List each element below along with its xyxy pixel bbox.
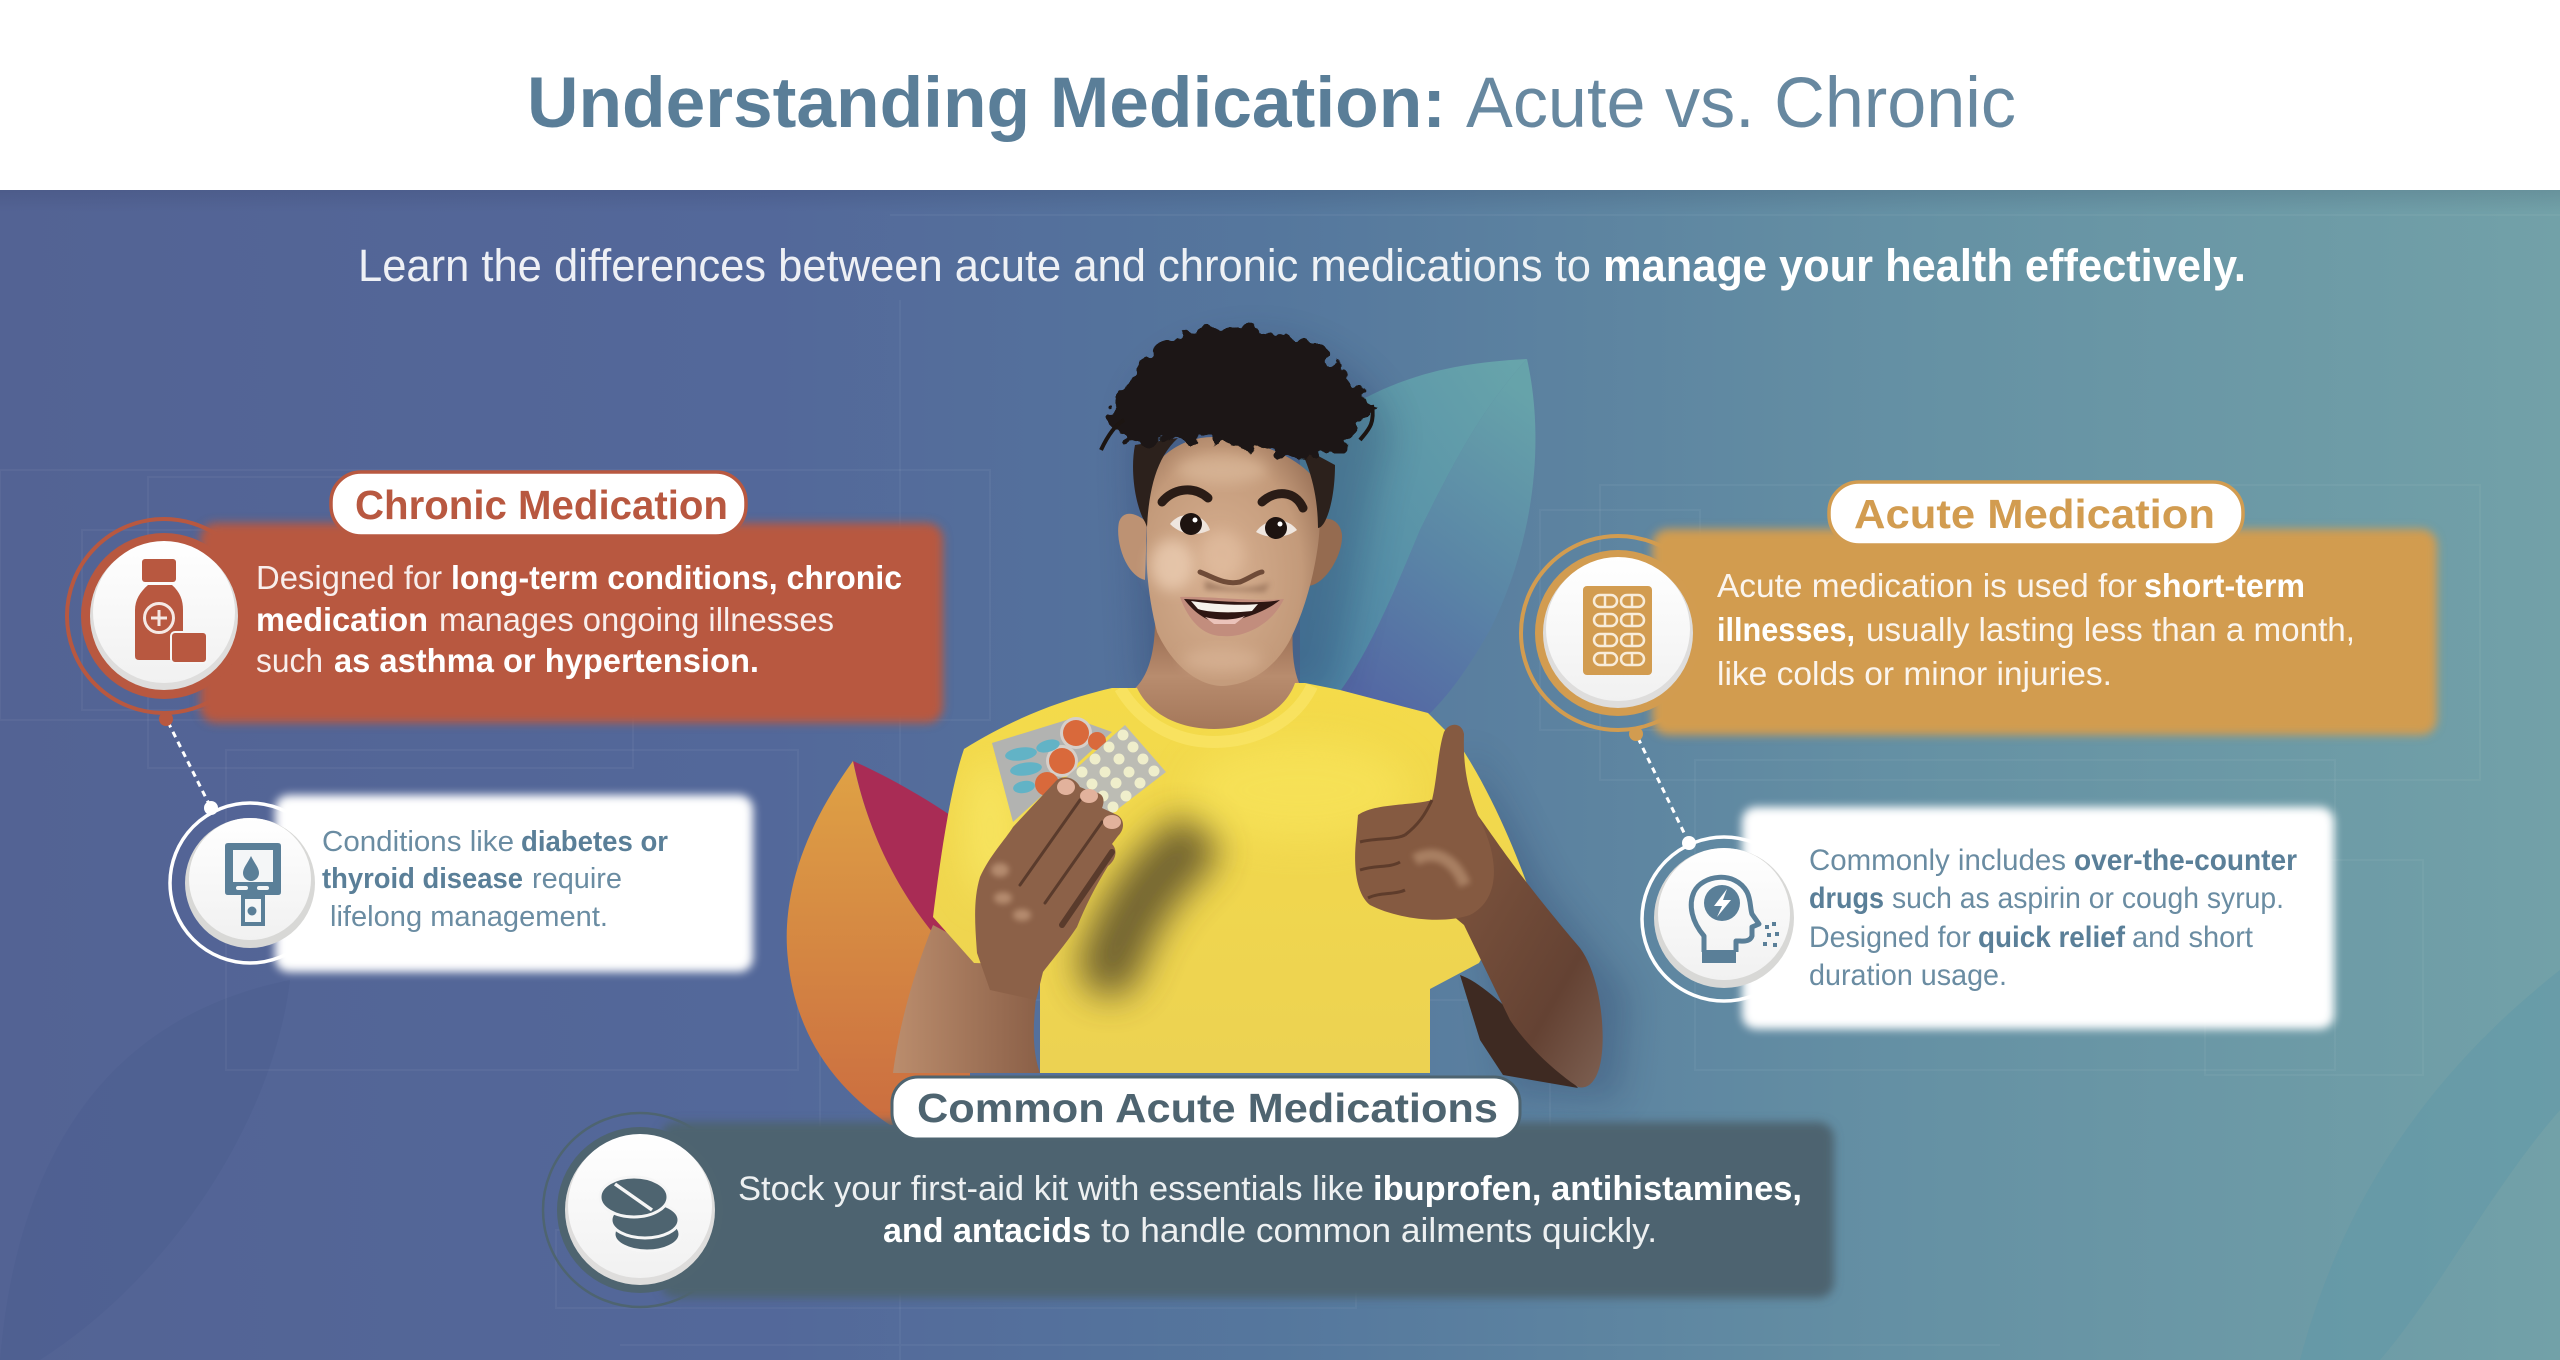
- panel text: [322, 826, 668, 933]
- panel text: long-term conditions, chronic: [451, 559, 902, 596]
- panel text: lifelong management.: [330, 901, 608, 933]
- face: [1147, 437, 1320, 686]
- panel background: [275, 795, 753, 972]
- panel text: diabetes or: [521, 826, 668, 858]
- upper arm right: [1460, 975, 1578, 1088]
- eyebrows: [1162, 490, 1303, 508]
- panel text: Stock your first-aid kit with essentials like: [738, 1170, 1364, 1208]
- panel background: [1742, 807, 2334, 1029]
- panel text: such as aspirin or cough syrup.: [1892, 882, 2284, 915]
- panel text: [256, 559, 902, 679]
- panel text: like colds or minor injuries.: [1717, 655, 2112, 692]
- panel: common acute medications: [543, 1077, 1834, 1307]
- ears: [1118, 514, 1342, 586]
- blister pack: blue and orange pills: [992, 717, 1112, 822]
- nose: [1200, 531, 1270, 592]
- fist with thumb up: [1355, 725, 1494, 920]
- panel text: short-term: [2144, 567, 2305, 604]
- panel text: [738, 1170, 1802, 1250]
- open smile: [1180, 597, 1284, 636]
- heading pill: Chronic Medication: [355, 482, 728, 528]
- decorative leaf: teal: [1300, 359, 1535, 718]
- heading pill: [331, 472, 746, 536]
- icon: glucose meter: [185, 818, 315, 948]
- panel text: Commonly includes: [1809, 844, 2066, 877]
- panel text: medication: [256, 601, 428, 638]
- header band: [0, 0, 2560, 190]
- cheek highlights: [1150, 456, 1267, 672]
- panel text: illnesses,: [1717, 611, 1855, 648]
- icon: head with lightning bolt: [1654, 848, 1794, 988]
- panel text: duration usage.: [1809, 959, 2007, 992]
- panel: chronic medication: [67, 472, 943, 723]
- panel text: to handle common ailments quickly.: [1101, 1212, 1657, 1250]
- heading pill: [892, 1077, 1520, 1139]
- panel background: [1652, 529, 2437, 735]
- panel text: require: [532, 863, 622, 895]
- connector: chronic: [159, 712, 218, 815]
- icon ring outer: [1642, 837, 1806, 1001]
- panel text: manages ongoing illnesses: [439, 601, 834, 638]
- hair side fade: [1133, 438, 1335, 528]
- panel text: as asthma or hypertension.: [334, 642, 759, 679]
- panel text: Acute medication is used for: [1717, 567, 2137, 604]
- decorative leaf: orange and crimson: [787, 761, 970, 1125]
- panel text: and short: [2132, 921, 2254, 954]
- panel text: Designed for: [256, 559, 442, 596]
- icon ring outer: [170, 803, 330, 963]
- panel text: drugs: [1809, 882, 1884, 915]
- t-shirt: [933, 683, 1530, 1073]
- person shadow: [1132, 340, 1628, 1099]
- left arm: [893, 925, 1042, 1073]
- panel: acute medication: [1521, 482, 2437, 735]
- title: [527, 64, 2016, 143]
- panel: over-the-counter drugs: [1642, 807, 2334, 1029]
- panel text: such: [256, 642, 323, 679]
- panel text: and antacids: [883, 1212, 1091, 1250]
- connector: acute: [1629, 727, 1696, 850]
- panel: chronic conditions: [170, 795, 753, 972]
- icon ring outer: [1521, 536, 1715, 730]
- panel background: [660, 1122, 1834, 1298]
- holding hand: [975, 777, 1123, 1000]
- blister pack: white pills: [1063, 725, 1166, 842]
- title: Understanding Medication:: [527, 64, 1446, 143]
- panel text: Conditions like: [322, 826, 514, 858]
- panel text: [1809, 844, 2297, 992]
- title: Acute vs. Chronic: [1466, 64, 2016, 143]
- icon ring outer: [67, 519, 261, 713]
- neck: [1133, 620, 1299, 733]
- panel text: Designed for: [1809, 921, 1971, 954]
- icon: medicine bottle: [81, 533, 247, 699]
- icon ring outer: [543, 1113, 737, 1307]
- icon: stacked pills: [557, 1127, 723, 1293]
- curly hair: [1101, 327, 1373, 458]
- subtitle: [358, 240, 2246, 291]
- panel text: quick relief: [1978, 921, 2126, 954]
- shirt shading: [964, 686, 1410, 965]
- icon: blister pack: [1535, 550, 1701, 716]
- panel text: thyroid disease: [322, 863, 523, 895]
- person holding medication: [893, 327, 1628, 1099]
- panel text: usually lasting less than a month,: [1866, 611, 2355, 648]
- heading pill: Common Acute Medications: [917, 1085, 1498, 1131]
- panel text: [1717, 567, 2355, 692]
- right forearm: [1440, 805, 1603, 1087]
- heading pill: Acute Medication: [1854, 491, 2215, 537]
- panel text: ibuprofen, antihistamines,: [1373, 1170, 1802, 1208]
- heading pill: [1829, 482, 2243, 545]
- panel text: over-the-counter: [2074, 844, 2297, 877]
- eyes: [1170, 513, 1297, 539]
- panel background: [200, 523, 943, 723]
- subtitle: manage your health effectively.: [1603, 240, 2246, 291]
- subtitle: Learn the differences between acute and chronic medications to: [358, 240, 1591, 291]
